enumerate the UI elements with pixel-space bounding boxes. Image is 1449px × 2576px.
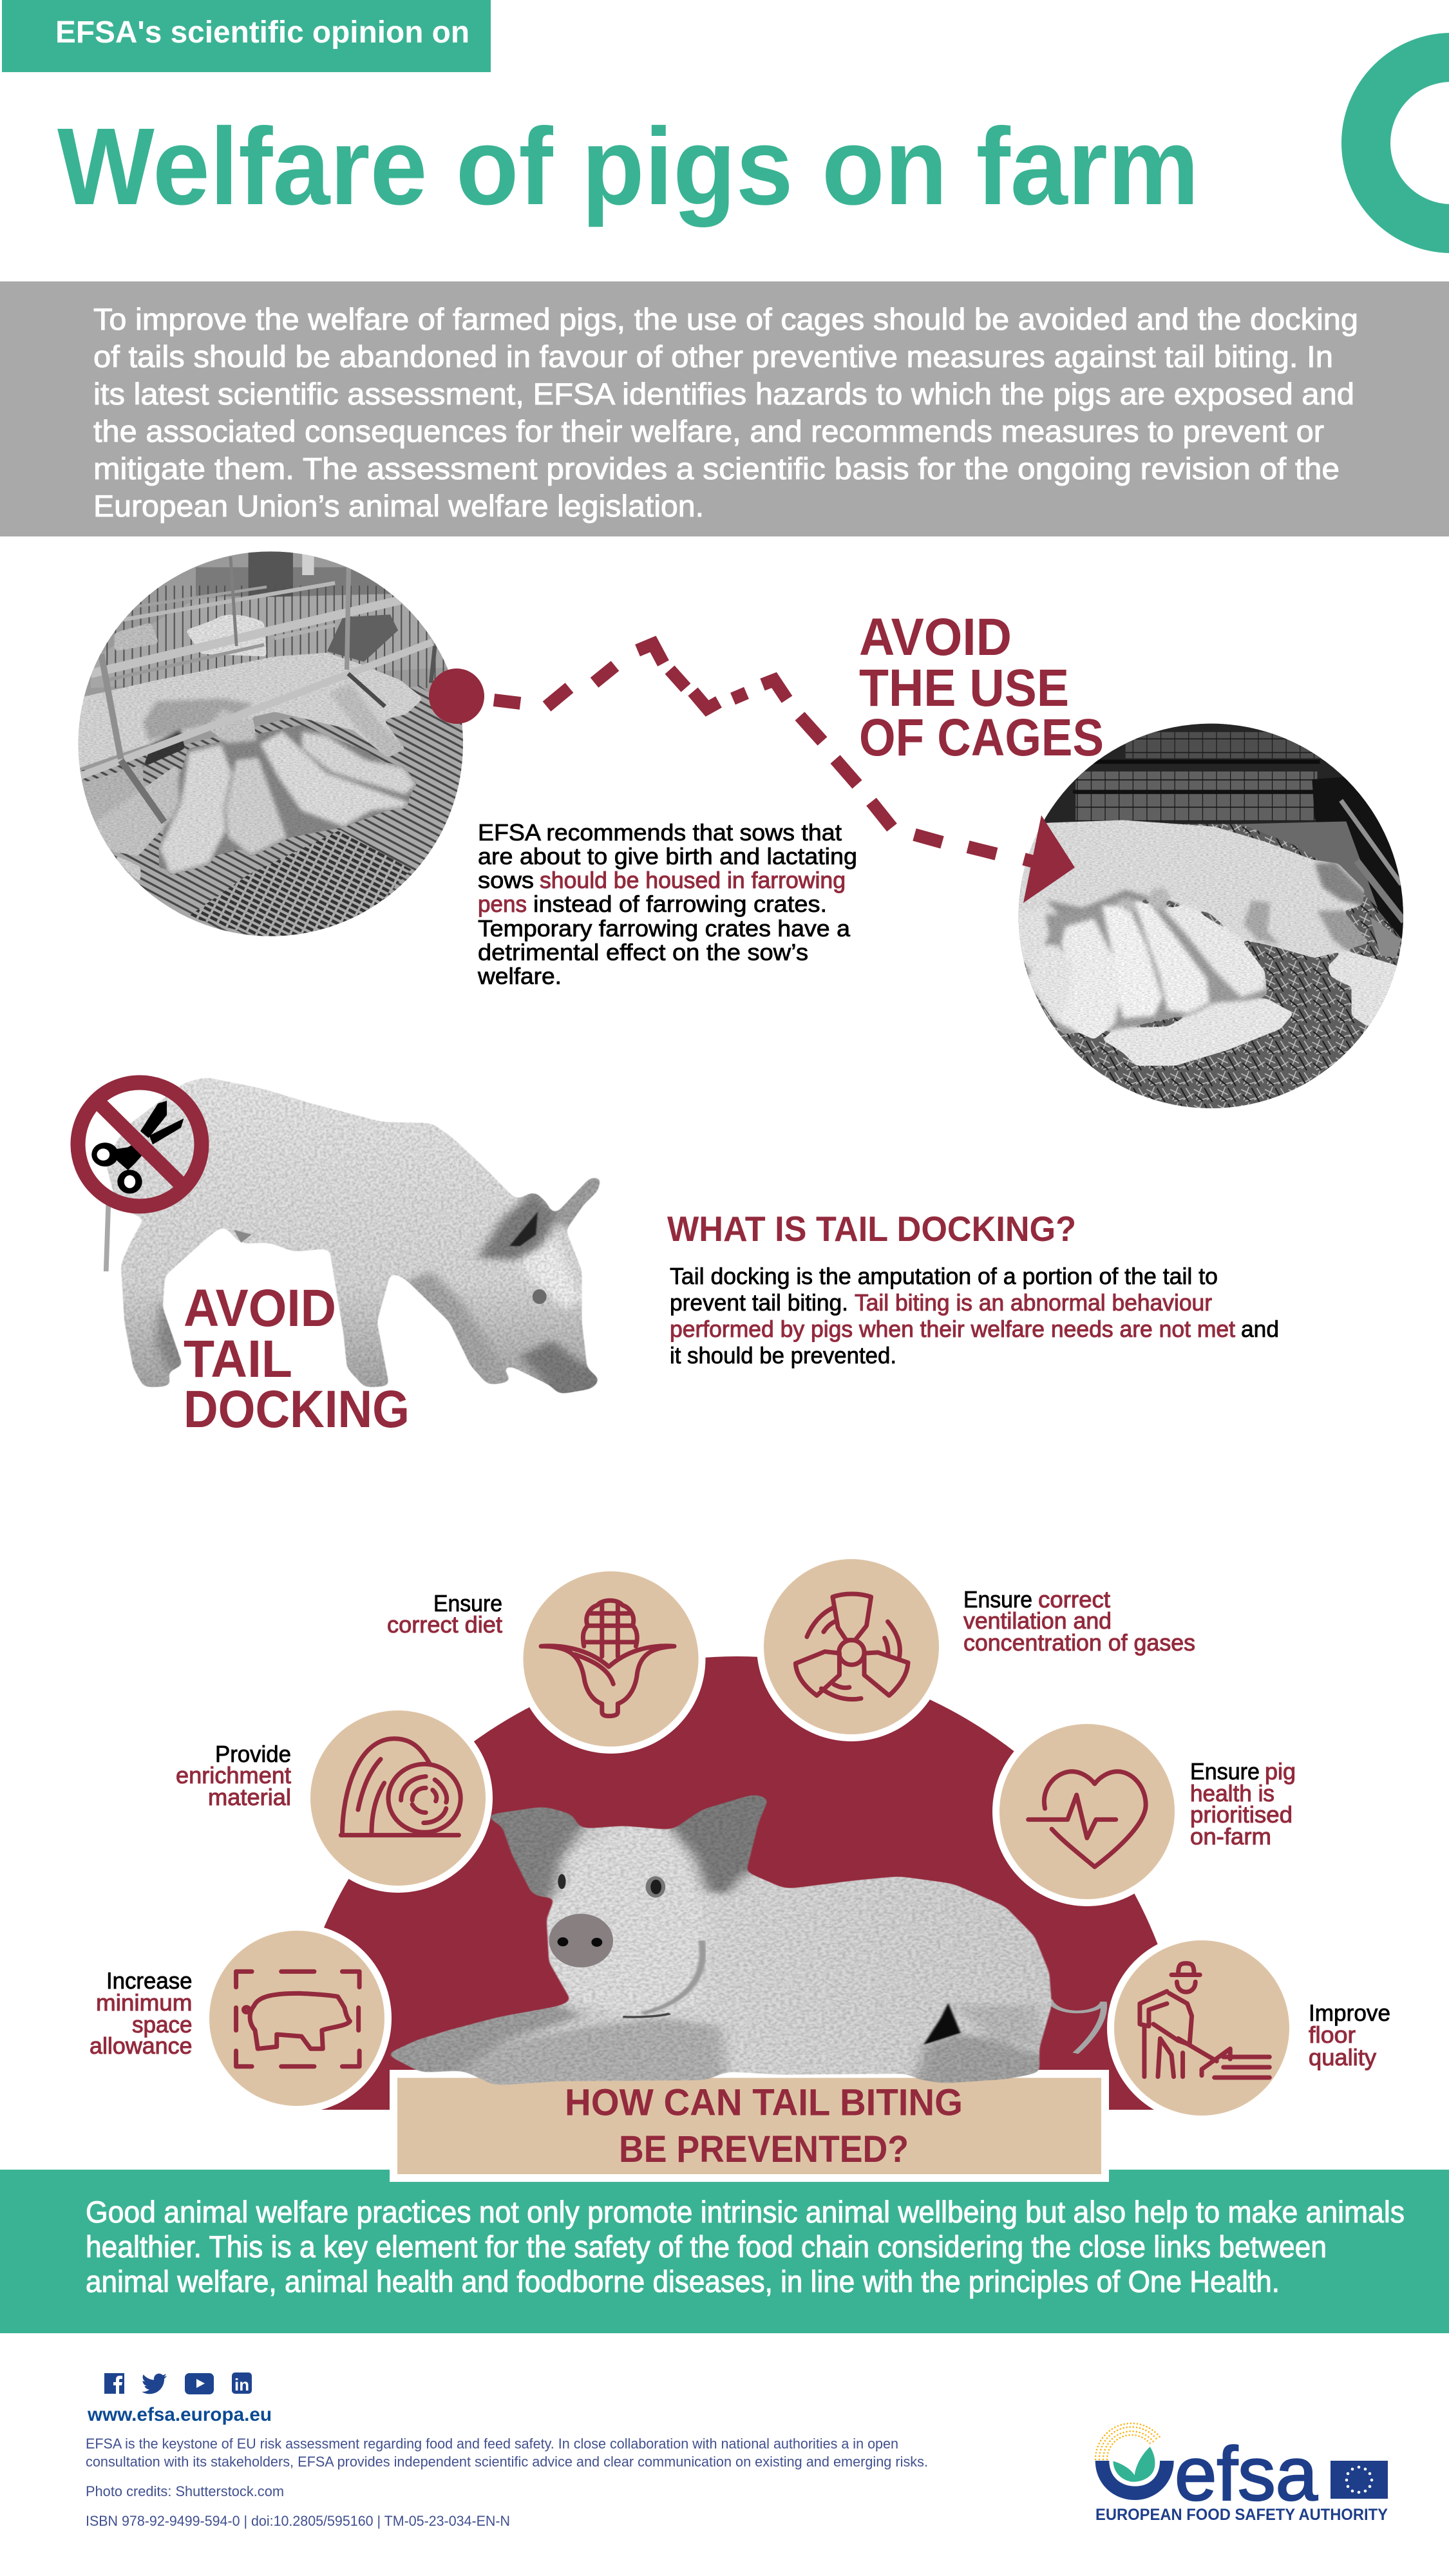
heading: avoid the use of cages: OF CAGES	[859, 708, 1104, 767]
text: footer description	[86, 2436, 928, 2529]
panel: introduction: To improve the welfare of farmed pigs, the use of cages should be avoided and the docking	[93, 302, 1358, 336]
label: enrichment material: enrichment	[176, 1762, 291, 1788]
icon: farmer with shovel	[1107, 1933, 1296, 2123]
panel: introduction: European Union’s animal welfare legislation.	[93, 489, 704, 523]
logo: EFSA	[1095, 2423, 1388, 2524]
illustration: standing pig	[105, 1077, 601, 1394]
label: pig health: Ensure	[1190, 1758, 1260, 1785]
heading: avoid the use of cages: AVOID	[859, 608, 1012, 667]
label: pig health	[1190, 1758, 1296, 1850]
logo dots	[1095, 2423, 1161, 2459]
text: tail docking explanation: performed by pigs when their welfare needs are not met	[670, 1316, 1235, 1342]
photo: sow with piglets on straw	[1019, 724, 1403, 1108]
panel: introduction: mitigate them. The assessment provides a scientific basis for the ongoing revision of the	[93, 451, 1340, 486]
icon: pig in space frame	[202, 1924, 392, 2113]
label: minimum space allowance	[90, 1967, 192, 2059]
heading: avoid tail docking	[184, 1279, 410, 1439]
heading box: how can tail biting be prevented: BE PREVENTED?	[619, 2128, 909, 2170]
label: floor quality: quality	[1309, 2044, 1376, 2070]
text: tail docking explanation	[670, 1263, 1279, 1368]
heading: avoid tail docking: AVOID	[184, 1279, 336, 1338]
label: ventilation: correct	[1038, 1586, 1110, 1613]
heading: avoid tail docking: TAIL	[184, 1330, 292, 1388]
icon: corn	[516, 1564, 706, 1754]
text: tail docking explanation: it should be prevented.	[670, 1342, 896, 1368]
label: ventilation	[963, 1586, 1195, 1656]
panel: green closing statement: healthier. This is a key element for the safety of the food chain considering the close links between	[86, 2230, 1327, 2264]
label: correct diet	[387, 1590, 502, 1638]
label: pig health: on-farm	[1190, 1823, 1271, 1850]
text: farrowing recommendation: Temporary farrowing crates have a	[478, 915, 851, 942]
text: farrowing recommendation: instead of farrowing crates.	[533, 891, 827, 917]
label: pig health: prioritised	[1190, 1801, 1293, 1828]
text: farrowing recommendation	[477, 819, 857, 989]
icon: linkedin	[232, 2372, 252, 2394]
heading: avoid tail docking: DOCKING	[184, 1380, 410, 1439]
icon: hay bale	[303, 1703, 493, 1893]
label: minimum space allowance: space	[132, 2011, 192, 2038]
icon: facebook	[104, 2373, 124, 2394]
label: floor quality: Improve	[1309, 2000, 1390, 2026]
heading: avoid the use of cages: THE USE	[859, 659, 1069, 717]
text: footer description: ISBN 978-92-9499-594-0 | doi:10.2805/595160 | TM-05-23-034-EN-N	[86, 2513, 510, 2529]
panel: semicircle backdrop	[287, 1656, 1188, 2110]
title: Welfare of pigs on farm	[57, 106, 1199, 228]
icon: linkedin: in	[234, 2375, 249, 2394]
illustration: lying pig	[386, 1794, 1104, 2085]
header tab	[2, 0, 491, 72]
text: farrowing recommendation: welfare.	[477, 963, 562, 989]
text: footer description: Photo credits: Shutterstock.com	[86, 2483, 284, 2499]
heading box: how can tail biting be prevented	[390, 2070, 1109, 2182]
icons: social media	[104, 2372, 252, 2394]
heading: avoid the use of cages	[859, 608, 1104, 767]
text: website: www.efsa.europa.eu	[87, 2404, 272, 2425]
label: minimum space allowance: allowance	[90, 2032, 192, 2059]
photo: sow in farrowing crate	[79, 551, 463, 936]
arrow: dashed route between photos	[429, 644, 1075, 903]
label: correct diet: Ensure	[433, 1590, 502, 1616]
panel: introduction: the associated consequences for their welfare, and recommends measures to prevent or	[93, 414, 1324, 448]
icon: youtube	[185, 2373, 214, 2394]
icon: twitter	[142, 2374, 167, 2394]
text: farrowing recommendation: EFSA recommends that sows that	[478, 819, 842, 846]
logo mark	[1095, 2447, 1174, 2500]
text: tail docking explanation: prevent tail biting.	[670, 1289, 848, 1316]
decorative ring	[1366, 57, 1449, 229]
arrowhead	[1023, 815, 1075, 903]
label: floor quality: floor	[1309, 2022, 1356, 2048]
icon: ventilation fan	[757, 1552, 946, 1741]
text: footer description: EFSA is the keystone of EU risk assessment regarding food and feed safety. In close collaboration with national authorities a in open	[86, 2436, 898, 2452]
text: tail docking explanation: and	[1241, 1316, 1279, 1342]
logo tagline: EUROPEAN FOOD SAFETY AUTHORITY	[1095, 2506, 1388, 2524]
text: tail docking explanation: Tail docking is the amputation of a portion of the tail to	[670, 1263, 1218, 1289]
label: correct diet: correct diet	[387, 1611, 502, 1638]
start dot	[429, 668, 484, 724]
text: farrowing recommendation: should be housed in farrowing	[540, 867, 846, 893]
header tab: EFSA's scientific opinion on	[55, 15, 469, 50]
icon: heart with pulse	[992, 1717, 1182, 1906]
heading box: how can tail biting be prevented: HOW CAN TAIL BITING	[565, 2081, 963, 2124]
panel: green closing statement	[0, 2170, 1449, 2333]
label: minimum space allowance: Increase	[106, 1967, 192, 1994]
label: ventilation: ventilation and	[963, 1607, 1112, 1634]
label: enrichment material: Provide	[215, 1741, 291, 1767]
icon: scissors	[91, 1101, 184, 1193]
text: tail docking explanation: Tail biting is an abnormal behaviour	[855, 1289, 1212, 1316]
icon: no tail docking sign	[78, 1083, 202, 1206]
label: enrichment material	[176, 1741, 291, 1810]
text: farrowing recommendation: are about to give birth and lactating	[478, 843, 857, 869]
panel: introduction: of tails should be abandoned in favour of other preventive measures against tail biting. In	[93, 339, 1333, 374]
label: ventilation: concentration of gases	[963, 1629, 1195, 1656]
text: farrowing recommendation: pens	[478, 891, 527, 917]
label: pig health: health is	[1190, 1780, 1274, 1806]
text: farrowing recommendation: sows	[478, 867, 534, 893]
panel: introduction: its latest scientific assessment, EFSA identifies hazards to which the pigs are exposed and	[93, 377, 1354, 411]
panel: introduction	[0, 281, 1449, 536]
text: farrowing recommendation: detrimental effect on the sow’s	[478, 939, 808, 965]
label: enrichment material: material	[208, 1784, 291, 1810]
label: pig health: pig	[1265, 1758, 1296, 1785]
panel: green closing statement: Good animal welfare practices not only promote intrinsic animal wellbeing but also help to make animals	[86, 2195, 1405, 2229]
heading: what is tail docking: WHAT IS TAIL DOCKING?	[667, 1209, 1076, 1249]
EU flag	[1331, 2461, 1388, 2499]
text: footer description: consultation with its stakeholders, EFSA provides independent scientific advice and clear communication on existing and emerging risks.	[86, 2454, 928, 2470]
label: minimum space allowance: minimum	[96, 1989, 192, 2016]
label: ventilation: Ensure	[963, 1586, 1032, 1613]
label: floor quality	[1309, 2000, 1390, 2070]
logo wordmark: efsa	[1175, 2432, 1318, 2517]
panel: green closing statement: animal welfare, animal health and foodborne diseases, in line with the principles of One Health.	[86, 2264, 1280, 2298]
